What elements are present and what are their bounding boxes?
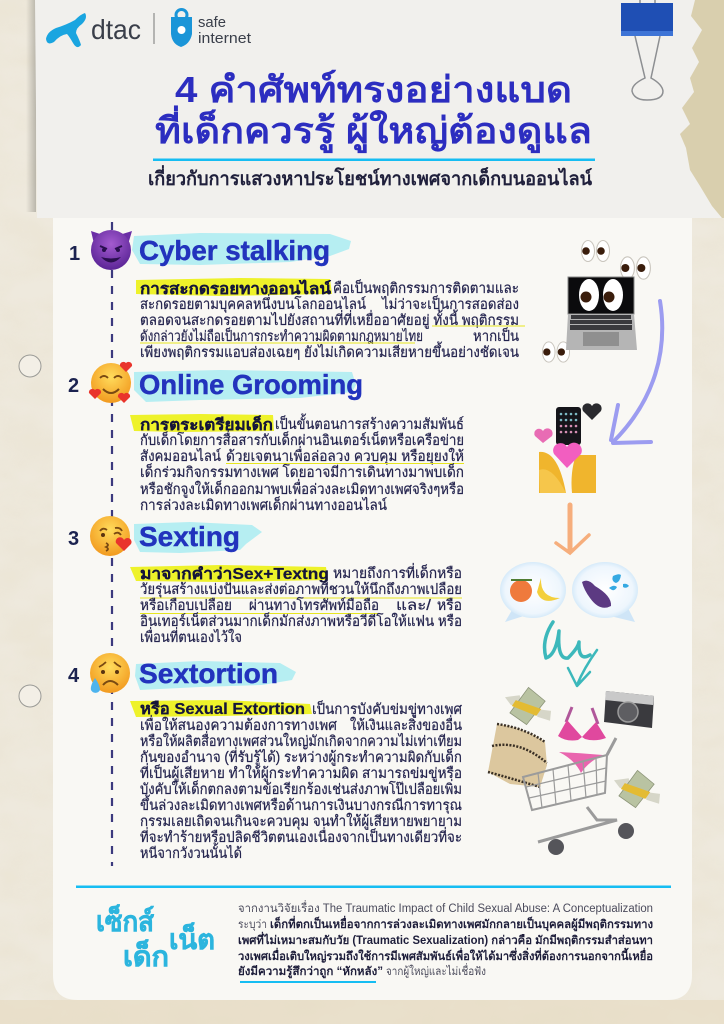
body text: การล่วงละเมิดทางเพศเด็กผ่านทางออนไลน์ [140,495,387,514]
footer research text: จากผู้ใหญ่และไม่เชื่อฟัง [386,963,486,978]
body text: ขึ้นล่วงละเมิดทางเพศหรือด้านการเงินบางกรณีการทารุณ [140,794,462,814]
footer logo text: เน็ต [169,922,215,955]
illustration: laptop with eyes [542,240,650,362]
body text: บังคับให้เด็กตกลงตามข้อเรียกร้องเช่นส่งภาพโป๊เปลือยเพิ่ม [140,779,462,798]
arrow: teal scribble [545,622,597,686]
subtitle: เกี่ยวกับการแสวงหาประโยชน์ทางเพศจากเด็กบนออนไลน์ [148,165,592,190]
heading: Online Grooming [139,369,363,400]
footer divider [76,886,671,888]
laptop [568,277,634,314]
heading: Sexting [139,521,240,552]
icon: face blowing a kiss [90,516,132,556]
body text: เป็นขั้นตอนการสร้างความสัมพันธ์ [275,413,464,433]
body text: สะกดรอยตามบุคคลหนึ่งบนโลกออนไลน์ [140,294,366,313]
body text: เพียงพฤติกรรมแอบส่องเฉยๆ ยังไม่เกิดความเสียหายขึ้นอย่างชัดเจน [140,341,519,361]
body text: เพื่อให้สนองความต้องการทางเพศ [140,715,338,734]
footer logo text: เด็ก [123,939,169,972]
footer logo text [96,904,215,972]
arrow: purple curve [611,301,662,443]
section 1: cyber stalking [69,230,525,361]
icon: dtac mark [46,13,86,47]
body text: การสะกดรอยทางออนไลน์ [140,279,331,298]
body text: มาจากคำว่าSex+Textng [140,565,329,583]
illustration: phone and couple [534,403,602,493]
footer research text: เพศที่ไม่เหมาะสมกับวัย (Traumatic Sexualization) กล่าวคือ มักมีพฤติกรรมสำส่อนทา [238,931,653,947]
body text: ผ่านทางโทรศัพท์มือถือ [249,596,379,614]
logo: dtac safe internet: internet [198,30,252,47]
illustration: chat bubbles [500,562,638,622]
icon: safe internet shield [171,10,192,47]
body text: กรรมเลยเถิดจนเกินจะควบคุม จนทำให้ผู้เสียหายพยายาม [140,812,462,830]
footer logo text: เซ็กส์ [96,904,155,937]
number 3: 3 [68,528,79,550]
binder hole bottom [19,685,41,707]
section 4: sextortion [68,653,463,862]
header shadow [26,0,36,212]
icon: purple devil emoji [91,230,132,270]
body text: ให้เงินและสิ่งของอื่น [350,715,462,734]
divider [154,13,155,44]
binder hole top [19,355,41,377]
body text: ดังกล่าวยังไม่ถือเป็นการกระทำความผิดตามกฎหมายไทย [140,326,423,345]
heading highlight [134,522,262,553]
timeline dashed line [111,222,113,866]
footer research text: จากงานวิจัยเรื่อง The Traumatic Impact of Child Sexual Abuse: A Conceptualization [238,900,653,915]
body text: หากเป็น [473,326,519,345]
body text: หรือ [437,597,462,614]
body text: เพื่อนที่ตนเองไว้ใจ [140,627,242,646]
body text: ด้วยเจตนาเพื่อล่อลวง ควบคุม หรือยุยงให้ [226,446,464,465]
body text: หมายถึงการที่เด็กหรือ [333,563,462,582]
body text: เป็นการบังคับข่มขู่ทางเพศ [312,699,463,718]
footer research text: ยังมีความรู้สึกว่าถูก “หักหลัง” [238,965,383,979]
heading highlight [134,370,356,402]
body text: ที่จะทำร้ายหรือปลิดชีวิตตนเองเนื่องจากเป็นทางเดียวที่จะ [140,827,462,846]
body text [130,413,464,514]
panel: header torn paper [35,0,722,218]
body text: กันของอำนาจ (ที่รับรู้ได้) ระหว่างผู้กระทำความผิดกับเด็ก [140,747,462,766]
dtac wordmark: dtac [91,14,141,45]
number 4: 4 [68,665,80,687]
body text: อินเทอร์เน็ตส่วนมากเด็กมักส่งภาพหรือวีดีโอให้แฟน หรือ [140,611,462,630]
number 2: 2 [68,375,79,397]
shopping cart [523,738,634,855]
body text: วัยรุ่นสร้างแบ่งปันและส่งต่อภาพที่ชวนให้นึกถึงภาพเปลือย [140,579,462,598]
arrow: orange [556,505,589,553]
icon: sad sweat face [90,653,130,693]
section 2: online grooming [68,362,464,514]
heading highlight [135,661,296,690]
bikini [558,707,606,773]
body text: ที่เป็นผู้เสียหาย ทำให้ผู้กระทำความผิด สามารถข่มขู่หรือ [140,763,462,782]
title [155,69,592,154]
body text: หรือ Sexual Extortion [140,700,305,718]
body text: ตลอดจนสะกดรอยตามไปยังสถานที่ที่เหยื่ออาศัยอยู่ ทั้งนี้ พฤติกรรม [140,309,519,329]
body text [130,563,462,646]
title underline [153,158,595,161]
icon: binder clip [621,0,673,100]
body text: หรือให้ผลิตสื่อทางเพศส่วนใหญ่มักเกิดจากความไม่เท่าเทียม [140,731,462,750]
body text: กับเด็กโดยการสื่อสารกับเด็กผ่านอินเตอร์เน็ตหรือเครือข่าย [140,430,464,449]
body text: การตระเตรียมเด็ก [140,414,273,434]
icon: smiling face with hearts [89,362,132,403]
panel: content sheet [53,218,692,1000]
bubble with eggplant and water [572,562,638,622]
number 1: 1 [69,243,80,265]
logo: dtac safe internet [46,10,252,47]
safe internet wordmark: safe [198,14,226,31]
footer research text: ระบุว่า [238,919,267,931]
body text: เด็กร่วมกิจกรรมทางเพศ โดยอาจมีการเดินทางมาพบเด็ก [140,462,464,481]
heading highlight [132,233,351,265]
camera [604,691,654,728]
bubble with peach and banana [500,562,566,622]
body text: คือเป็นพฤติกรรมการติดตามและ [333,278,519,297]
title: 4 คำศัพท์ทรงอย่างแบด [175,69,572,110]
body text [130,699,463,862]
film reel [488,724,547,787]
body text [136,278,525,361]
body text: และ/ [396,598,432,614]
body text: หรือชักจูงให้เด็กออกมาพบเพื่อล่วงละเมิดทางเพศจริงๆหรือ [140,479,464,498]
body text: สังคมออนไลน์ [140,447,221,465]
illustration: sextortion items [488,687,660,855]
body text: หนีจากวังวนนั้นได้ [140,842,242,862]
footer research text: วงเพศเมื่อเติบใหญ่รวมถึงใช้การมีเพศสัมพันธ์เพื่อให้ได้มาซึ่งสิ่งที่ต้องการนอกจากนี้เหยื่อ [238,947,653,963]
footer research text: เด็กที่ตกเป็นเหยื่อจากการล่วงละเมิดทางเพศมักกลายเป็นบุคคลผู้มีพฤติกรรมทาง [270,915,653,932]
heading: Sextortion [139,658,278,689]
footer short underline [240,981,376,983]
body text: ไม่ว่าจะเป็นการสอดส่อง [381,294,519,313]
heading: Cyber stalking [139,235,330,266]
title: ที่เด็กควรรู้ ผู้ใหญ่ต้องดูแล [155,105,592,154]
section 3: sexting [68,516,462,646]
body text: หรือเกือบเปลือย [140,597,232,614]
footer research text [238,900,653,979]
